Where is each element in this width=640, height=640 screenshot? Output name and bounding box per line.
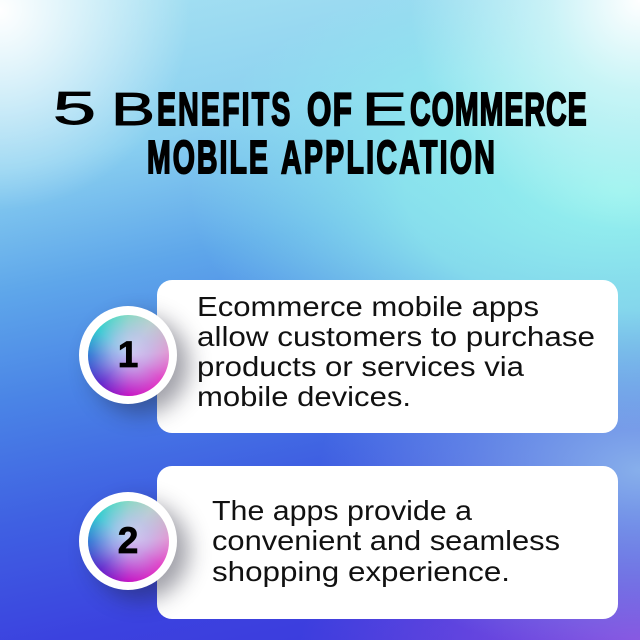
icon: number 1 badge: 1: [118, 334, 138, 375]
title: OF: [307, 84, 352, 136]
text block: benefit 1: mobile devices.: [197, 381, 411, 412]
title: 5: [53, 82, 96, 134]
title: ENEFITS: [157, 84, 290, 136]
text block: benefit 2: shopping experience.: [212, 556, 510, 587]
text block: benefit 1: allow customers to purchase: [197, 321, 595, 352]
panel: benefit 2 card: [157, 466, 618, 619]
text block: benefit 2: convenient and seamless: [212, 525, 560, 556]
text block: benefit 1: Ecommerce mobile apps: [197, 291, 539, 322]
text block: benefit 1: products or services via: [197, 351, 524, 382]
title: B: [111, 83, 155, 135]
title: COMMERCE: [410, 84, 587, 136]
icon: number 2 badge: [79, 492, 177, 590]
panel: benefit 1 card: [157, 280, 618, 433]
title: E: [362, 83, 407, 135]
icon: number 1 badge: [79, 306, 177, 404]
title: MOBILE: [147, 132, 268, 184]
title: APPLICATION: [281, 132, 495, 184]
icon: number 2 badge: 2: [118, 520, 138, 561]
title: [53, 82, 587, 184]
text block: benefit 2: The apps provide a: [212, 495, 472, 526]
